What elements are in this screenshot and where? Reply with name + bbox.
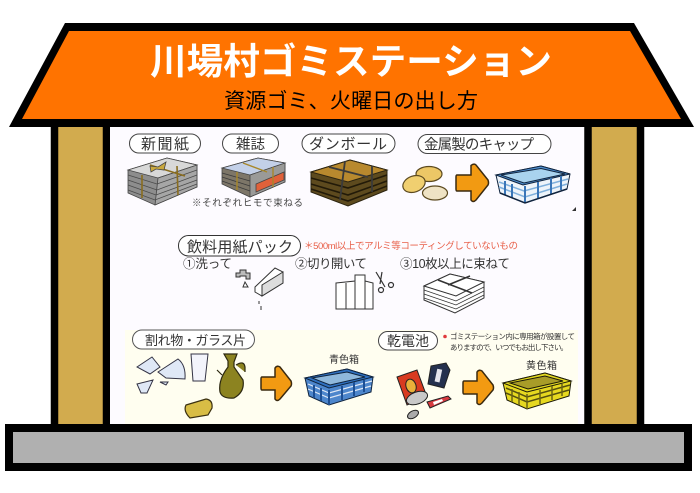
note: battery collection box xyxy=(443,331,575,352)
label: dry batteries xyxy=(378,332,438,350)
icon: blue crate lower xyxy=(305,369,373,405)
icon: crushed can xyxy=(185,399,212,418)
icon: glass cup xyxy=(191,354,208,381)
icon: olive vase xyxy=(217,354,245,398)
note: battery collection box: ありますので、いつでもお出し下さい。 xyxy=(450,342,568,352)
label: metal caps xyxy=(418,134,551,154)
arrow: caps to crate xyxy=(456,164,488,202)
note: red carton caveat: ＊500ml以上でアルミ等コーティングしていないもの xyxy=(304,240,518,252)
note: tie with string: ※それぞれヒモで束ねる xyxy=(192,198,303,209)
label: paper drink cartons: 飲料用紙パック xyxy=(187,239,293,256)
icon: magazine bundle xyxy=(222,158,285,197)
title: 川場村ゴミステーション xyxy=(150,41,552,82)
icon: scissors xyxy=(376,272,394,292)
arrow: batteries to yellow crate xyxy=(463,370,494,404)
label: magazines: 雑誌 xyxy=(236,136,266,153)
icon: faucet and carton xyxy=(236,268,283,310)
label: newspaper xyxy=(130,134,200,153)
icon: newspaper bundle xyxy=(128,158,197,205)
base platform xyxy=(9,428,688,467)
label: metal caps: 金属製のキャップ xyxy=(424,136,534,154)
icon: yellow crate xyxy=(503,373,571,409)
subtitle: 資源ゴミ、火曜日の出し方 xyxy=(224,90,478,113)
left pillar xyxy=(54,120,106,428)
blue box label: 青色箱 xyxy=(329,353,359,366)
poster panel xyxy=(110,127,584,424)
right pillar xyxy=(588,120,640,428)
icon: bottle caps xyxy=(400,166,448,200)
label: cardboard: ダンボール xyxy=(309,136,387,153)
icon: glass shards xyxy=(137,357,185,393)
yellow box label: 黄色箱 xyxy=(526,359,557,372)
label: dry batteries: 乾電池 xyxy=(387,333,429,349)
icon: batteries xyxy=(397,363,451,421)
label: broken glass xyxy=(132,330,254,349)
icon: bundled cartons xyxy=(424,274,484,313)
label: broken glass: 割れ物・ガラス片 xyxy=(145,333,246,348)
icon: blue crate xyxy=(496,166,570,203)
icon: cardboard bundle xyxy=(311,160,387,206)
step 1 text: ①洗って xyxy=(183,257,232,271)
roof xyxy=(9,23,694,127)
step 2 text: ②切り開いて xyxy=(295,257,367,271)
label: magazines xyxy=(222,134,278,153)
note: battery collection box: ゴミステーション内に専用箱が設置して xyxy=(450,331,575,341)
icon: opened carton xyxy=(336,275,373,309)
arrow: glass to blue crate xyxy=(261,366,292,400)
label: newspaper: 新聞紙 xyxy=(141,136,189,153)
step 3 text: ③10枚以上に束ねて xyxy=(400,256,510,271)
